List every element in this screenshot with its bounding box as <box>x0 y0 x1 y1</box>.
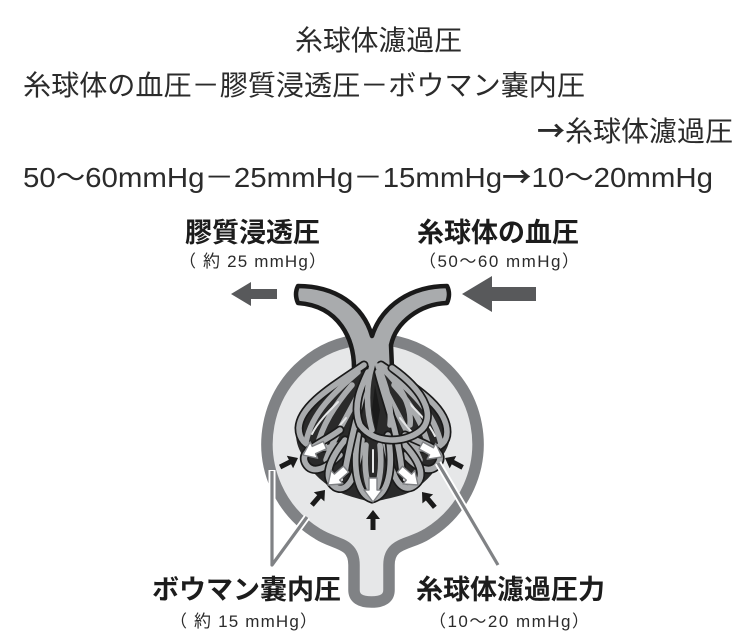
label: glomerular blood pressure: （50～60 mmHg） <box>419 252 579 271</box>
label: Bowman capsule pressure: （ 約 15 mmHg） <box>170 612 317 631</box>
label: oncotic pressure <box>179 218 326 271</box>
dark mass behind capillaries <box>296 362 450 503</box>
label: oncotic pressure: 膠質浸透圧 <box>185 218 320 248</box>
label: glomerular filtration pressure: （10～20 mmHg） <box>429 612 589 631</box>
formula result: →糸球体濾過圧 <box>537 110 733 150</box>
label: glomerular filtration pressure <box>416 575 605 631</box>
label: glomerular blood pressure <box>417 218 579 271</box>
capillary loops <box>299 365 447 499</box>
label: glomerular blood pressure: 糸球体の血圧 <box>417 218 579 248</box>
afferent and efferent tubes <box>296 286 449 368</box>
label: Bowman capsule pressure <box>152 575 341 631</box>
arrow: blood pressure <box>462 276 536 312</box>
leader lines: Bowman capsule pressure <box>272 470 307 565</box>
formula in words: 糸球体の血圧－膠質浸透圧－ボウマン嚢内圧 <box>23 70 585 101</box>
formula in numbers: 50～60mmHg－25mmHg－15mmHg →10～20mmHg <box>23 156 713 196</box>
black inward arrows: capsule pressure <box>277 452 466 530</box>
glomerulus <box>296 286 450 503</box>
label: glomerular filtration pressure: 糸球体濾過圧力 <box>416 575 605 605</box>
label: Bowman capsule pressure: ボウマン嚢内圧 <box>152 575 341 605</box>
white outward arrows: filtration pressure <box>299 437 446 502</box>
leader line: filtration pressure <box>438 463 498 565</box>
Bowman capsule <box>267 340 478 602</box>
label: oncotic pressure: （ 約 25 mmHg） <box>179 252 326 271</box>
title: 糸球体濾過圧 <box>295 25 462 56</box>
arrow: oncotic pressure <box>231 282 277 306</box>
